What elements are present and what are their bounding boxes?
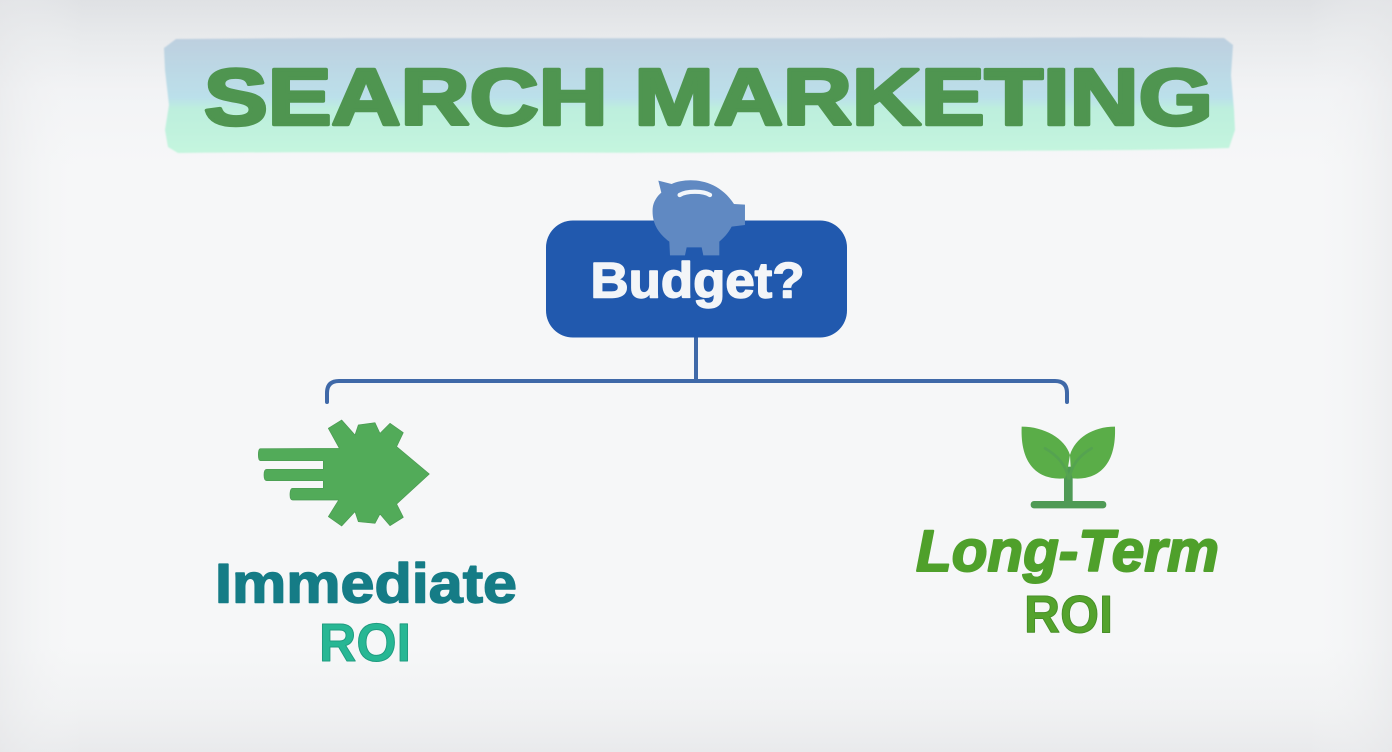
- connector lines: [327, 338, 1067, 402]
- label: ROI: ROI: [1024, 586, 1113, 644]
- branch: immediate ROI: [215, 420, 517, 673]
- box label: Budget?: [590, 252, 804, 308]
- branch: long-term ROI: [916, 427, 1219, 644]
- label: ROI: ROI: [319, 613, 411, 673]
- box: [546, 220, 847, 338]
- title text: SEARCH MARKETING: [204, 52, 1213, 142]
- decision box: budget: [546, 180, 847, 338]
- icon: piggy bank: [653, 180, 745, 255]
- label: long-term: Long-Term: [916, 519, 1219, 584]
- title banner: [164, 38, 1235, 153]
- icon: sprout: [1022, 427, 1115, 508]
- label: immediate: Immediate: [215, 552, 517, 614]
- icon: speeding arrow: [258, 420, 429, 526]
- title highlight band: [164, 38, 1235, 153]
